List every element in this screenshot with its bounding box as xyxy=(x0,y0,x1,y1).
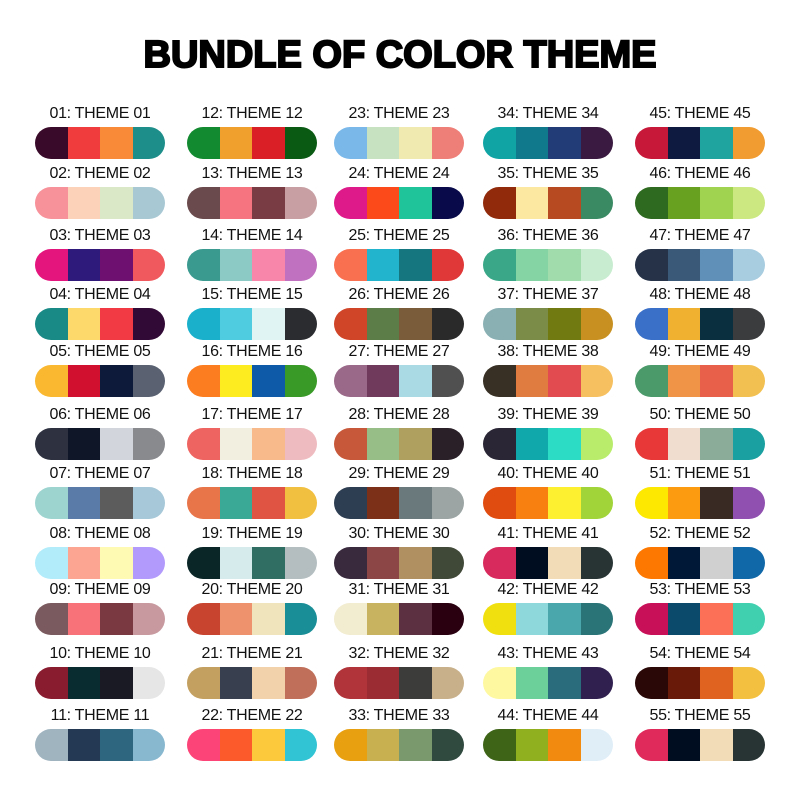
theme 18: 18: THEME 18 xyxy=(201,465,303,482)
theme 15: 15: THEME 15 xyxy=(201,286,303,303)
theme 41 xyxy=(483,523,613,579)
theme 01 xyxy=(35,105,165,159)
theme 12: 12: THEME 12 xyxy=(201,105,303,122)
theme 29 xyxy=(334,465,464,519)
theme 36: 36: THEME 36 xyxy=(497,227,599,244)
theme 24: 24: THEME 24 xyxy=(348,165,450,182)
theme 09 xyxy=(35,581,165,635)
theme 35: 35: THEME 35 xyxy=(497,165,599,182)
theme 39: 39: THEME 39 xyxy=(497,406,599,423)
theme 17: 17: THEME 17 xyxy=(201,406,303,423)
theme 26 xyxy=(334,286,464,340)
theme 33: 33: THEME 33 xyxy=(348,707,450,724)
theme 40 xyxy=(483,465,613,519)
theme 33 xyxy=(334,707,464,761)
theme 31: 31: THEME 31 xyxy=(348,581,450,598)
theme 39 xyxy=(483,406,613,460)
theme 48: 48: THEME 48 xyxy=(649,286,751,303)
theme 35 xyxy=(483,165,613,219)
theme 34: 34: THEME 34 xyxy=(497,105,599,122)
theme 52 xyxy=(635,523,765,579)
theme 38: 38: THEME 38 xyxy=(497,343,599,360)
theme 41: 41: THEME 41 xyxy=(497,525,599,542)
theme 45 xyxy=(635,103,765,159)
theme 04: 04: THEME 04 xyxy=(49,286,151,303)
theme 05: 05: THEME 05 xyxy=(49,343,151,360)
theme 25: 25: THEME 25 xyxy=(348,227,450,244)
theme 44 xyxy=(483,705,613,761)
theme 13: 13: THEME 13 xyxy=(201,165,303,182)
theme 54: 54: THEME 54 xyxy=(649,645,751,662)
theme 23: 23: THEME 23 xyxy=(348,105,450,122)
theme 52: 52: THEME 52 xyxy=(649,525,751,542)
theme 37 xyxy=(483,286,613,340)
theme 23 xyxy=(334,105,464,159)
theme 07: 07: THEME 07 xyxy=(49,465,151,482)
theme 07 xyxy=(35,465,165,519)
theme 09: 09: THEME 09 xyxy=(49,581,151,598)
theme 34 xyxy=(483,105,613,159)
theme 14: 14: THEME 14 xyxy=(201,227,303,244)
theme 18 xyxy=(187,465,317,519)
theme 43: 43: THEME 43 xyxy=(497,645,599,662)
theme 50 xyxy=(635,404,765,460)
theme 08 xyxy=(35,525,165,579)
theme 12 xyxy=(187,105,317,159)
theme 49: 49: THEME 49 xyxy=(649,343,751,360)
theme 10 xyxy=(35,645,165,699)
theme 24 xyxy=(334,165,464,219)
theme 20: 20: THEME 20 xyxy=(201,581,303,598)
theme 37: 37: THEME 37 xyxy=(497,286,599,303)
theme 19: 19: THEME 19 xyxy=(201,525,303,542)
theme 13 xyxy=(187,165,317,219)
theme 42 xyxy=(483,579,613,635)
theme 47 xyxy=(635,225,765,281)
theme 08: 08: THEME 08 xyxy=(49,525,151,542)
theme 46 xyxy=(635,163,765,219)
theme 28 xyxy=(334,406,464,460)
theme 38 xyxy=(483,343,613,397)
theme 44: 44: THEME 44 xyxy=(497,707,599,724)
theme 49 xyxy=(635,341,765,397)
theme 28: 28: THEME 28 xyxy=(348,406,450,423)
theme 15 xyxy=(187,286,317,340)
theme 53: 53: THEME 53 xyxy=(649,581,751,598)
theme 55 xyxy=(635,705,765,761)
theme 10: 10: THEME 10 xyxy=(49,645,151,662)
theme 05 xyxy=(35,343,165,397)
theme 42: 42: THEME 42 xyxy=(497,581,599,598)
theme 50: 50: THEME 50 xyxy=(649,406,751,423)
theme 03: 03: THEME 03 xyxy=(49,227,151,244)
theme 53 xyxy=(635,579,765,635)
theme 32 xyxy=(334,645,464,699)
theme 16 xyxy=(187,343,317,397)
theme 17 xyxy=(187,406,317,460)
theme 02 xyxy=(35,165,165,219)
theme 20 xyxy=(187,581,317,635)
theme 36 xyxy=(483,227,613,281)
theme 03 xyxy=(35,227,165,281)
theme 55: 55: THEME 55 xyxy=(649,707,751,724)
theme 11 xyxy=(35,707,165,761)
theme 21 xyxy=(187,645,317,699)
theme 14 xyxy=(187,227,317,281)
theme 31 xyxy=(334,581,464,635)
theme 21: 21: THEME 21 xyxy=(201,645,303,662)
theme 27: 27: THEME 27 xyxy=(348,343,450,360)
theme 19 xyxy=(187,525,317,579)
theme 48 xyxy=(635,284,765,340)
theme 16: 16: THEME 16 xyxy=(201,343,303,360)
theme 11: 11: THEME 11 xyxy=(51,707,149,724)
theme 45: 45: THEME 45 xyxy=(649,105,751,122)
theme 29: 29: THEME 29 xyxy=(348,465,450,482)
theme 06 xyxy=(35,406,165,460)
theme 51 xyxy=(635,463,765,519)
theme 51: 51: THEME 51 xyxy=(649,465,751,482)
theme 43 xyxy=(483,643,613,699)
theme 01: 01: THEME 01 xyxy=(49,105,151,122)
theme 30 xyxy=(334,525,464,579)
theme 32: 32: THEME 32 xyxy=(348,645,450,662)
theme 22 xyxy=(187,707,317,761)
theme 04 xyxy=(35,286,165,340)
theme 25 xyxy=(334,227,464,281)
theme 40: 40: THEME 40 xyxy=(497,465,599,482)
title: BUNDLE OF COLOR THEME xyxy=(144,34,656,76)
theme 47: 47: THEME 47 xyxy=(649,227,751,244)
theme 22: 22: THEME 22 xyxy=(201,707,303,724)
theme 46: 46: THEME 46 xyxy=(649,165,751,182)
theme 02: 02: THEME 02 xyxy=(49,165,151,182)
theme 06: 06: THEME 06 xyxy=(49,406,151,423)
theme 26: 26: THEME 26 xyxy=(348,286,450,303)
theme 30: 30: THEME 30 xyxy=(348,525,450,542)
theme 27 xyxy=(334,343,464,397)
theme 54 xyxy=(635,643,765,699)
